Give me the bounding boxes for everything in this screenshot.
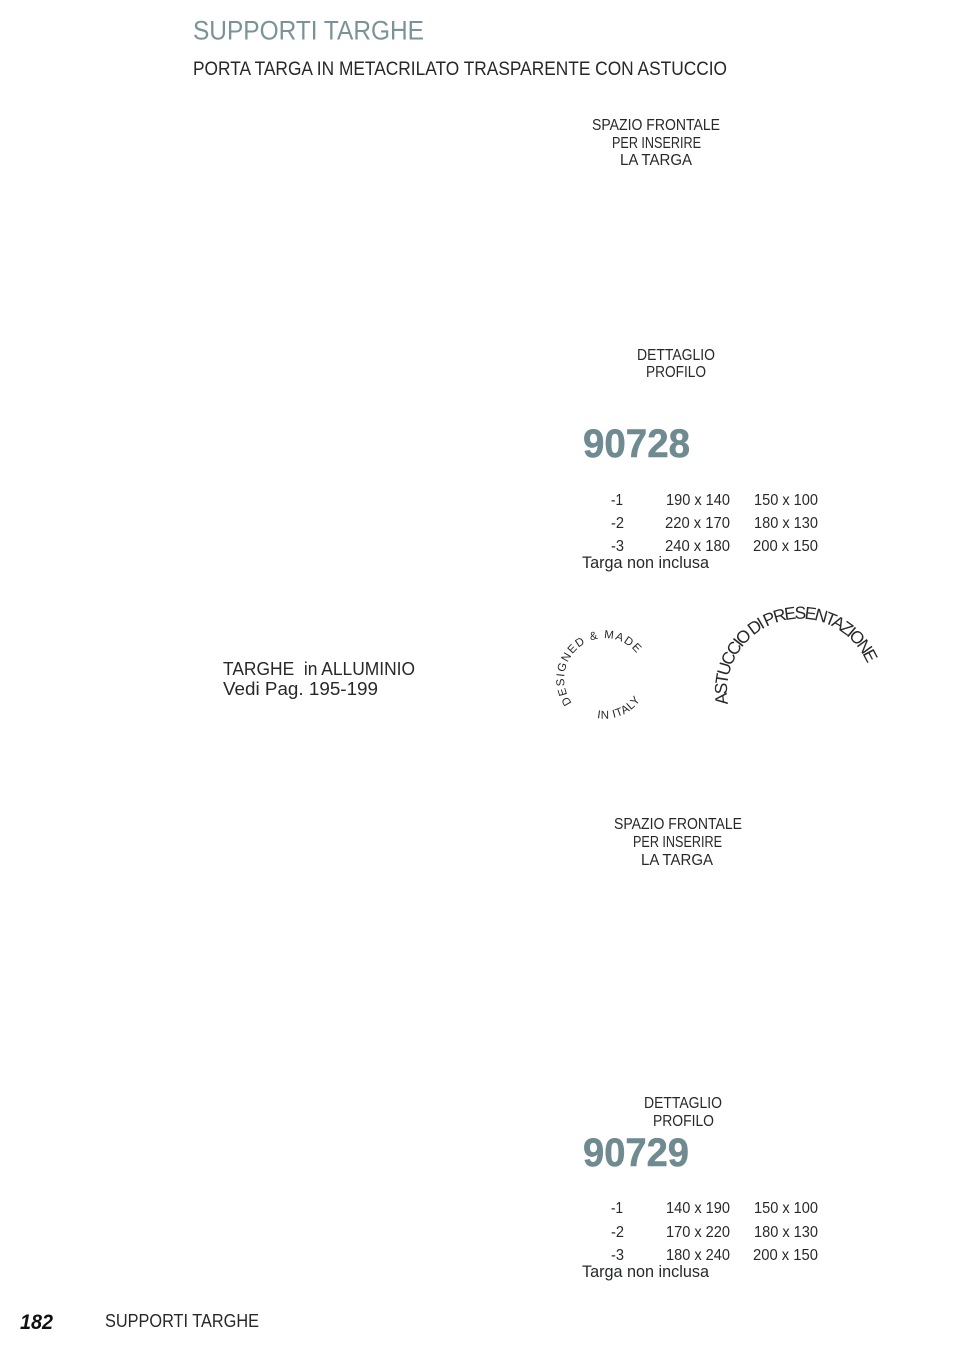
size table 90728: 220 x 170: [665, 515, 730, 532]
size table 90728: 200 x 150: [753, 538, 818, 555]
size table 90729: 180 x 240: [666, 1247, 730, 1264]
size table 90729: 170 x 220: [666, 1224, 730, 1241]
circular badge: designed and made in Italy: IN ITALY: [598, 695, 638, 719]
callout: front space, product 90729: LA TARGA: [641, 852, 714, 869]
curved label: presentation case: ASTUCCIO DI PRESENTAZIONE: [714, 606, 878, 704]
aluminium plates note: TARGHE in ALLUMINIO: [223, 659, 415, 679]
size table 90728: -2: [611, 515, 624, 532]
callout: profile detail, product 90728: PROFILO: [646, 364, 706, 381]
size table 90728: 190 x 140: [666, 492, 730, 509]
note: plate not included, 90729: Targa non inclusa: [582, 1263, 710, 1281]
callout: front space, product 90728: PER INSERIRE: [612, 135, 701, 152]
size table 90728: -1: [611, 492, 623, 509]
page number: 182: [20, 1311, 53, 1334]
title: SUPPORTI TARGHE: [193, 16, 424, 46]
size table 90728: 150 x 100: [754, 492, 818, 509]
callout: front space, product 90729: SPAZIO FRONTALE: [614, 816, 742, 833]
aluminium plates note: Vedi Pag. 195-199: [223, 679, 378, 699]
size table 90728: 180 x 130: [754, 515, 818, 532]
size table 90729: -1: [611, 1200, 623, 1217]
aluminium plates note: [223, 659, 415, 699]
callout: profile detail, product 90728: DETTAGLIO: [637, 347, 715, 364]
size table 90729: 140 x 190: [666, 1200, 730, 1217]
circular badge: designed and made in Italy: DESIGNED & MADE: [556, 630, 642, 706]
size table 90728: [611, 492, 818, 555]
subtitle: PORTA TARGA IN METACRILATO TRASPARENTE CON ASTUCCIO: [193, 59, 727, 80]
size table 90729: 180 x 130: [754, 1224, 818, 1241]
product code 90728: 90728: [583, 422, 690, 466]
size table 90728: 240 x 180: [665, 538, 730, 555]
callout: front space, product 90728: [592, 117, 720, 169]
size table 90729: -2: [611, 1224, 624, 1241]
size table 90729: 150 x 100: [754, 1200, 818, 1217]
callout: front space, product 90728: LA TARGA: [620, 152, 693, 169]
callout: profile detail, product 90728: [637, 347, 715, 381]
size table 90728: -3: [611, 538, 624, 555]
note: plate not included, 90728: Targa non inclusa: [582, 554, 710, 572]
size table 90729: -3: [611, 1247, 624, 1264]
callout: profile detail, product 90729: PROFILO: [653, 1113, 714, 1130]
callout: front space, product 90729: PER INSERIRE: [633, 834, 722, 851]
size table 90729: [611, 1200, 818, 1264]
callout: profile detail, product 90729: DETTAGLIO: [644, 1095, 722, 1112]
size table 90729: 200 x 150: [753, 1247, 818, 1264]
callout: front space, product 90728: SPAZIO FRONTALE: [592, 117, 720, 134]
footer section name: SUPPORTI TARGHE: [105, 1311, 259, 1331]
product code 90729: 90729: [583, 1131, 689, 1175]
callout: profile detail, product 90729: [644, 1095, 722, 1130]
callout: front space, product 90729: [614, 816, 742, 869]
